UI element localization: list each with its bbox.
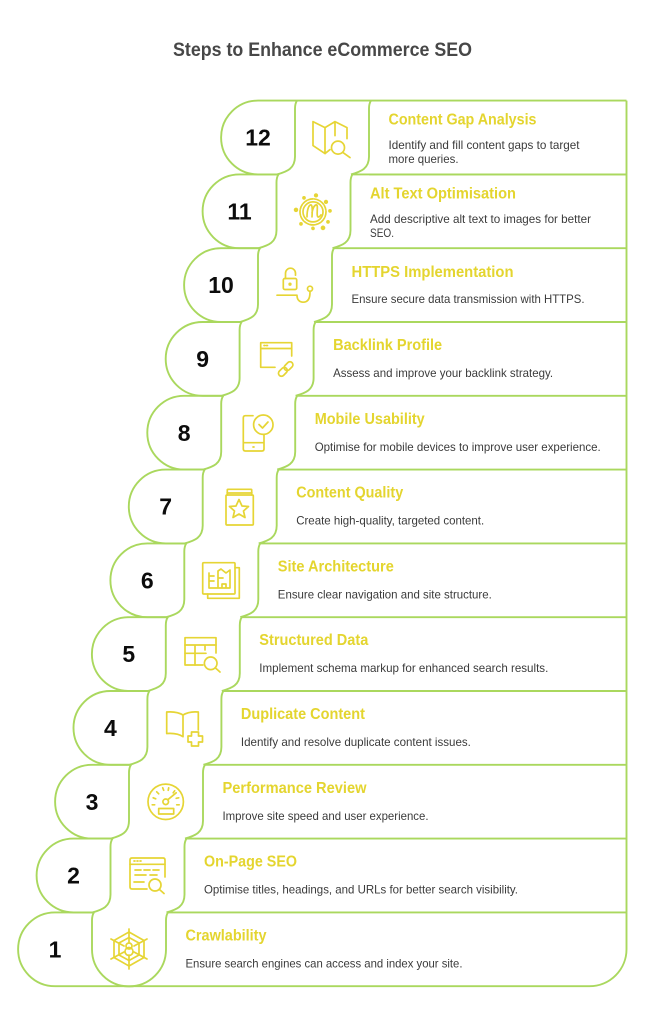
description: Optimise for mobile devices to improve user experience. (315, 440, 601, 454)
heading: Site Architecture (278, 558, 394, 575)
step 12: content gap analysis (221, 101, 627, 174)
step 11: alt text optimisation: SEO. (370, 226, 394, 240)
description: Assess and improve your backlink strategy. (333, 366, 553, 380)
heading: Performance Review (222, 780, 367, 797)
description: Identify and resolve duplicate content issues. (241, 735, 471, 749)
description: Optimise titles, headings, and URLs for better search visibility. (204, 883, 518, 897)
icon: layered site plan (203, 563, 239, 598)
icon: phone with check (243, 415, 273, 451)
step 11: alt text optimisation (203, 174, 627, 248)
description: Ensure secure data transmission with HTTPS. (352, 292, 584, 306)
icon: book with plus (167, 712, 202, 746)
heading: Content Gap Analysis (388, 112, 536, 129)
number 8: 8 (178, 420, 191, 446)
icon: padlock and cable (277, 268, 312, 302)
number 11: 11 (227, 198, 252, 224)
heading: On-Page SEO (204, 854, 297, 871)
description: Create high-quality, targeted content. (296, 514, 484, 528)
step 5: structured data (92, 617, 627, 691)
icon: page with magnifier (130, 858, 165, 894)
description: Ensure clear navigation and site structure. (278, 587, 492, 601)
number 6: 6 (141, 567, 154, 593)
heading: Content Quality (296, 485, 404, 502)
number 7: 7 (159, 494, 172, 520)
step 9: backlink profile (166, 322, 627, 396)
icon: browser window with link (261, 343, 294, 377)
number 2: 2 (67, 863, 80, 889)
step 8: mobile usability (147, 396, 627, 470)
heading: Alt Text Optimisation (370, 185, 516, 202)
description: Implement schema markup for enhanced search results. (259, 661, 548, 675)
number 3: 3 (86, 789, 98, 815)
step 10: https implementation (184, 248, 627, 322)
icon: speed gauge (148, 784, 183, 820)
heading: Mobile Usability (315, 411, 425, 428)
number 5: 5 (122, 641, 135, 667)
description: Ensure search engines can access and index your site. (186, 956, 462, 970)
description: Add descriptive alt text to images for better (370, 212, 591, 226)
step 1: crawlability (18, 912, 627, 986)
title: Steps to Enhance eCommerce SEO (173, 40, 472, 61)
number 1: 1 (49, 936, 62, 962)
step 7: content quality (129, 470, 627, 543)
icon: spider web (111, 929, 147, 969)
icon: map with magnifier (313, 122, 350, 158)
icon: book with star (226, 489, 253, 525)
description: Improve site speed and user experience. (222, 809, 428, 823)
number 12: 12 (245, 125, 271, 151)
heading: HTTPS Implementation (352, 264, 514, 281)
number 10: 10 (208, 272, 234, 298)
icon: image badge (295, 194, 331, 229)
outer right edge of panels (590, 101, 627, 986)
heading: Crawlability (186, 927, 267, 944)
number 9: 9 (196, 346, 209, 372)
step 4: duplicate content (74, 691, 627, 765)
heading: Backlink Profile (333, 337, 442, 354)
step 6: site architecture (110, 543, 627, 617)
step 3: performance review (55, 765, 627, 839)
step 12: content gap analysis: more queries. (388, 152, 458, 166)
icon: table with magnifier (185, 638, 220, 672)
heading: Structured Data (259, 632, 369, 649)
description: Identify and fill content gaps to target (388, 138, 580, 152)
step 2: on-page seo (37, 839, 627, 912)
number 4: 4 (104, 715, 117, 741)
heading: Duplicate Content (241, 706, 365, 723)
